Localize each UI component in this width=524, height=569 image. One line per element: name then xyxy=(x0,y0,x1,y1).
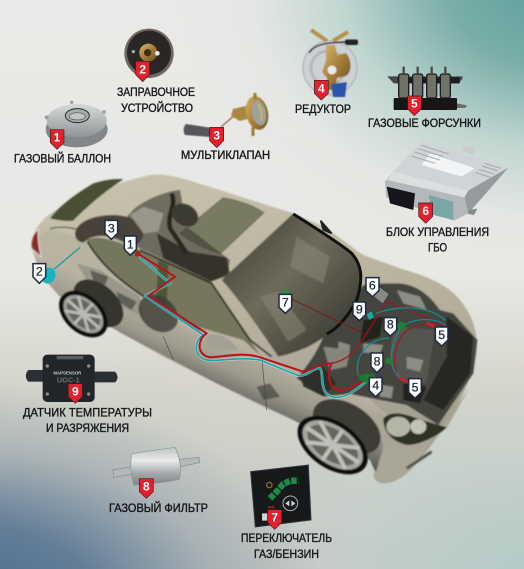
item 7: gas petrol switch xyxy=(241,465,332,561)
label: РЕДУКТОР xyxy=(295,104,351,116)
icon: reducer xyxy=(303,30,358,97)
sunroof xyxy=(180,198,264,253)
green filter 1 xyxy=(398,322,406,330)
item 9: temperature and vacuum sensor xyxy=(23,355,152,435)
thin red pipe xyxy=(332,302,443,373)
rear tire tread xyxy=(64,270,132,337)
icon: injectors xyxy=(387,67,467,110)
rear chassis clutter xyxy=(90,270,137,310)
white marker 9 xyxy=(353,302,366,321)
label: ЗАПРАВОЧНОЕ xyxy=(117,87,195,99)
door line xyxy=(163,337,267,410)
green filter 2 xyxy=(385,358,393,364)
white marker 3 xyxy=(105,220,118,239)
white marker 2 xyxy=(33,264,46,283)
front grille xyxy=(407,452,432,468)
item 8: gas filter xyxy=(109,447,208,515)
control unit box xyxy=(370,283,389,304)
marker 2: 2 xyxy=(139,62,146,76)
tail light xyxy=(31,229,41,257)
car cutaway illustration xyxy=(31,175,477,486)
white marker 4 xyxy=(369,378,382,397)
label: МУЛЬТИКЛАПАН xyxy=(181,150,270,162)
label: ГАЗОВЫЙ ФИЛЬТР xyxy=(109,502,208,515)
item 4: reducer xyxy=(295,30,358,116)
red main pipe xyxy=(138,254,365,390)
front bumper xyxy=(374,387,470,483)
white marker 8 upper xyxy=(384,318,397,336)
filler hose xyxy=(169,193,187,253)
icon: map sensor xyxy=(26,355,117,402)
teal sensor xyxy=(367,311,374,320)
white marker 6: 6 xyxy=(369,279,376,293)
gas pipes red and teal xyxy=(138,254,445,397)
white marker 1 xyxy=(124,236,136,255)
white marker 5 lower: 5 xyxy=(412,380,419,394)
item 3: multivalve xyxy=(181,93,271,162)
label: ДАТЧИК ТЕМПЕРАТУРЫ xyxy=(23,408,152,420)
item 6: control unit xyxy=(385,141,508,254)
gas tank well xyxy=(75,215,143,244)
windshield xyxy=(222,213,361,357)
tank valve xyxy=(135,251,141,257)
icon: multivalve xyxy=(184,93,271,137)
front tire tread xyxy=(303,388,390,466)
engine light parts xyxy=(338,290,427,398)
engine-like tank detail xyxy=(130,207,163,233)
marker 6: 6 xyxy=(422,204,429,218)
rear wheel xyxy=(50,281,117,347)
icon: ECU xyxy=(385,141,508,221)
icon: map sensor: UGC-1 xyxy=(57,376,80,385)
item 2: filler device: УСТРОЙСТВО xyxy=(121,102,193,115)
label: ГАЗОВЫЕ ФОРСУНКИ xyxy=(368,118,481,130)
spare wheel xyxy=(168,199,202,231)
green switch dot xyxy=(282,289,289,294)
white marker 8 lower xyxy=(371,353,383,373)
label: БЛОК УПРАВЛЕНИЯ xyxy=(386,227,489,239)
tank filler line xyxy=(54,247,80,269)
white marker 2: 2 xyxy=(36,265,43,279)
rear window xyxy=(50,179,123,221)
white marker 8 lower: 8 xyxy=(374,354,381,368)
white marker 4: 4 xyxy=(372,379,379,393)
marker 3: 3 xyxy=(213,128,220,142)
seats and chassis through the side xyxy=(77,263,143,317)
side mirror xyxy=(321,221,332,233)
engine bay xyxy=(297,283,477,425)
item 2: filler device xyxy=(117,29,195,115)
engine dark parts xyxy=(360,317,427,403)
car paint and interior layers xyxy=(31,175,477,486)
white marker 6 xyxy=(366,278,379,297)
door handle details xyxy=(257,383,280,400)
window frame lines xyxy=(87,242,272,357)
marker 8: 8 xyxy=(143,480,150,494)
item 6: control unit: ГБО xyxy=(428,242,447,254)
trunk crease xyxy=(50,227,77,229)
door mirror xyxy=(207,334,238,350)
icon: switch panel xyxy=(251,465,311,527)
marker 9: 9 xyxy=(72,385,79,399)
item 1: gas tank xyxy=(14,101,111,166)
dashboard details xyxy=(260,237,330,342)
white marker 3: 3 xyxy=(108,221,115,235)
lower side panels xyxy=(33,228,430,483)
front wheel xyxy=(287,404,378,486)
item 7: gas petrol switch: ГАЗ/БЕНЗИН xyxy=(254,549,319,561)
intake detail xyxy=(323,347,350,370)
label: ПЕРЕКЛЮЧАТЕЛЬ xyxy=(241,533,332,545)
radiator block xyxy=(423,317,473,410)
label: ГАЗОВЫЙ БАЛЛОН xyxy=(14,152,111,166)
item 9: temperature and vacuum sensor: И РАЗРЯЖЕНИЯ xyxy=(46,423,129,435)
marker 4: 4 xyxy=(318,81,325,95)
car body xyxy=(31,175,477,483)
white marker 5 upper xyxy=(435,327,448,346)
white marker 7: 7 xyxy=(282,295,289,309)
rear seat interior xyxy=(113,190,230,282)
teal main pipe halo xyxy=(140,257,367,397)
white marker 8 upper: 8 xyxy=(387,318,394,332)
transparent rear tire xyxy=(131,287,186,340)
fuel rail 1 xyxy=(427,323,435,327)
white marker 1: 1 xyxy=(127,237,134,251)
engine components xyxy=(390,327,435,383)
dark cargo shadow xyxy=(157,233,230,282)
teal branches xyxy=(357,308,445,377)
icon: filler xyxy=(124,29,174,78)
marker 5: 5 xyxy=(411,97,418,111)
icon: map sensor: MAPSENSOR xyxy=(53,371,82,376)
fuel rail 2 xyxy=(398,377,407,382)
headlight xyxy=(383,413,447,445)
item 5: gas injectors xyxy=(368,67,481,130)
window pillar strip xyxy=(156,260,168,310)
teal filler cap xyxy=(39,265,58,286)
white marker 7 xyxy=(279,294,292,313)
windshield black frame xyxy=(293,214,361,334)
side windows xyxy=(87,238,260,355)
white marker 9: 9 xyxy=(356,303,363,317)
firewall parts xyxy=(300,367,337,397)
marker 1: 1 xyxy=(54,130,61,144)
green reducer xyxy=(358,373,377,383)
marker 7: 7 xyxy=(271,511,278,525)
white marker 5 lower xyxy=(409,379,421,398)
icon: filter xyxy=(113,447,200,485)
teal main pipe xyxy=(140,257,367,397)
white marker 5 upper: 5 xyxy=(438,328,445,342)
icon: toroidal tank xyxy=(45,101,108,147)
switch wire xyxy=(290,298,363,333)
